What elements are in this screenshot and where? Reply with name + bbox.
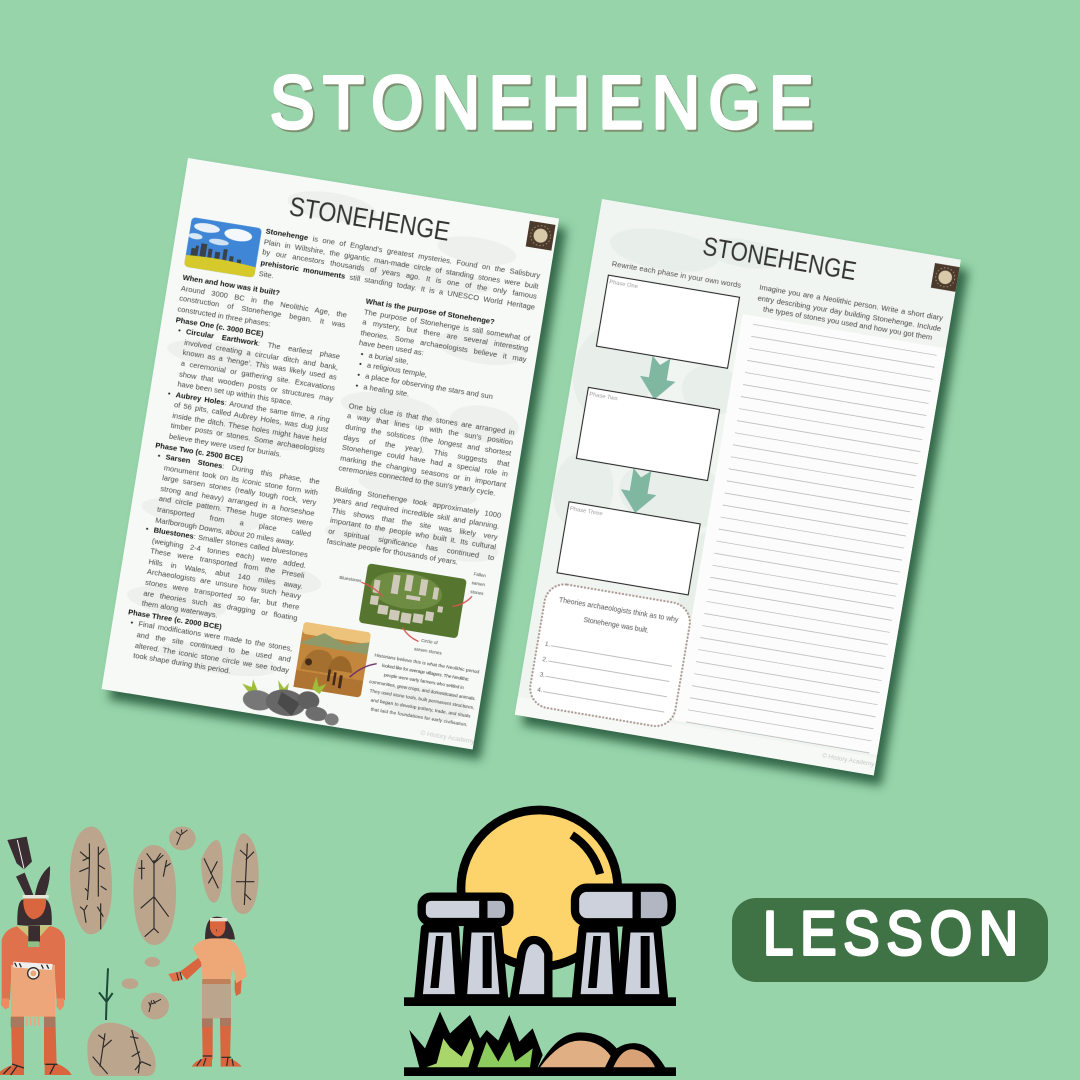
text: when and how was it built: Final modifications were made to the stones, <box>138 620 293 653</box>
panel: activity worksheet <box>515 199 961 775</box>
text: what is the purpose of stonehenge: a place for observing the stars and sun <box>365 371 494 401</box>
text: diary instruction <box>757 283 944 342</box>
text: what is the purpose of stonehenge: fascinate people for thousands of years. <box>326 537 459 567</box>
image caption <box>364 652 481 728</box>
text: when and how was it built: These were transported from the Preseli <box>150 546 305 580</box>
panel: theories dotted box <box>527 581 693 729</box>
text: what is the purpose of stonehenge: What is the purpose of Stonehenge? <box>365 297 495 326</box>
text: introduction: prehistoric monuments still standing today. It is a UNESCO World Heritage <box>260 258 536 312</box>
text: when and how was it built: Circular Earthwork: The earliest phase <box>185 327 341 361</box>
text: when and how was it built: Marlborough Downs, about 20 miles away. <box>155 515 296 547</box>
illustration: slim rock <box>201 840 223 903</box>
text: introduction: Stonehenge is one of England's greatest mysteries. Found on the Salisbury <box>265 227 541 280</box>
icon part: left lintel <box>422 897 509 922</box>
text: when and how was it built: believe they were used for burials. <box>168 432 282 459</box>
panel: theories dotted box: 3. <box>539 671 546 679</box>
illustration: rock with carvings, centre <box>133 845 176 945</box>
sheet heading: STONEHENGE <box>287 191 452 247</box>
text: when and how was it built: construction of Stonehenge began. It was <box>179 294 346 330</box>
icon part: lower ground line <box>404 1067 676 1076</box>
text: diary instruction: Imagine you are a Neolithic person. Write a short diary <box>759 283 944 322</box>
icon part: pillars <box>418 928 664 998</box>
panel: theories dotted box: Theories archaeologists think as to why <box>558 597 679 624</box>
watermark: © History Academy <box>822 753 876 768</box>
text: when and how was it built: Archaeologists are unsure how such heavy <box>146 567 302 601</box>
text: diary instruction: the types of stones you used and how you got them <box>762 305 933 342</box>
text: what is the purpose of stonehenge: or spiritual significance has continued to <box>328 526 495 562</box>
text: when and how was it built: Bluestones: Smaller stones called bluestones <box>153 526 308 560</box>
text: introduction: by our ancestors thousands of years ago. It is one of the only famous <box>262 248 537 301</box>
text: when and how was it built: show that wooden posts or structures may <box>179 369 334 403</box>
illustration: green plant <box>99 968 113 1020</box>
text: diary instruction: entry describing your day building Stonehenge. Include <box>757 293 942 333</box>
panel: theories dotted box: Stonehenge was built. <box>583 617 649 635</box>
sheet heading: STONEHENGE <box>701 231 858 286</box>
badge: lesson <box>732 898 1048 982</box>
text: when and how was it built: inside the ditch. These holes might have held <box>172 411 327 445</box>
text: when and how was it built: transported from a place called <box>156 505 312 539</box>
text: when and how was it built: Aubrey Holes: Around the same time, a ring <box>175 390 331 424</box>
illustration: small rock top <box>169 826 196 850</box>
text: when and how was it built: stones were transported so far, but there <box>145 578 300 612</box>
text: introduction: Site. <box>258 268 274 280</box>
illustration: smaller figure <box>168 917 247 1067</box>
box: phase one: Phase One <box>609 279 638 290</box>
text: when and how was it built: Around 3000 BC in the Neolithic Age, the <box>180 284 348 319</box>
image caption: and began to develop pottery, trade, and rituals <box>370 697 472 719</box>
photo: aerial view of stone circle <box>359 563 467 639</box>
panel: theories dotted box: 1. <box>544 641 551 649</box>
text: when and how was it built: them along waterways. <box>141 599 218 620</box>
image caption: communities, grew crops, and domesticated animals. <box>369 679 476 701</box>
arrow: phase one to phase two <box>637 354 679 403</box>
text: when and how was it built: have been set up within this space. <box>177 379 294 407</box>
text: when and how was it built: strong and heavy) arranged in a horseshoe <box>160 484 315 518</box>
box: phase three: Phase Three <box>569 506 603 517</box>
icon part: right lintel <box>575 888 672 922</box>
text: when and how was it built: of 56 pits, called Aubrey Holes, was dug just <box>173 400 329 434</box>
text: what is the purpose of stonehenge: a mystery, but there are several interesting <box>362 317 529 353</box>
text: when and how was it built: are theories such as dragging or floating <box>143 588 298 622</box>
illustration: rock with carvings, large left <box>70 827 112 934</box>
box: phase three <box>557 502 700 595</box>
photo: stonehenge under blue sky <box>184 217 262 278</box>
text: when and how was it built: altered. The iconic stone circle we see today <box>134 640 290 674</box>
text: what is the purpose of stonehenge: marking the changing seasons or in important <box>340 453 507 489</box>
arrow: phase two to phase three <box>617 467 660 516</box>
illustration: tall rock right <box>231 833 259 914</box>
text: what is the purpose of stonehenge: Building Stonehenge took approximately 1000 <box>335 484 502 520</box>
text: what is the purpose of stonehenge: have been used as: <box>358 338 424 358</box>
text: when and how was it built: timber posts or stones. Some archaeologists <box>170 421 325 455</box>
text: when and how was it built: and circle pattern. These huge stones were <box>158 494 314 528</box>
image caption: people were early farmers who settled in <box>384 672 465 690</box>
image labels: sarsen <box>471 580 486 587</box>
panel: information worksheet <box>102 158 559 749</box>
icon part: sun <box>461 810 618 967</box>
icon: history academy logo <box>526 221 556 251</box>
icon part: grass <box>409 1012 543 1070</box>
text: when and how was it built: Sarsen Stones: During this phase, the <box>165 452 320 486</box>
image labels: stones <box>470 589 485 596</box>
illustration: standing chief figure <box>0 837 72 1075</box>
instruction: rewrite each phase: Rewrite each phase in your own words <box>611 259 742 290</box>
text: what is the purpose of stonehenge: a religious temple, <box>366 361 428 380</box>
text: when and how was it built: known as a ‘henge’. This was likely used as <box>182 348 337 382</box>
text: what is the purpose of stonehenge: One big clue is that the stones are arranged in <box>348 401 515 437</box>
image caption: looked like for average villagers. The Neolithic <box>382 663 470 682</box>
diary writing lines <box>686 324 937 753</box>
icon part: mounds <box>537 1032 667 1070</box>
panel: theories dotted box: 4. <box>537 687 543 694</box>
text: introduction: Plain in Wiltshire, the gigantic man-made circle of standing stones were built <box>263 237 539 291</box>
text: what is the purpose of stonehenge: a way that lines up with the sun's position <box>346 411 514 447</box>
text: when and how was it built: monument took on its iconic stone form with <box>163 463 319 497</box>
box: phase two <box>576 387 720 481</box>
text: what is the purpose of stonehenge: theories. Some archaeologists believe it may <box>360 328 527 364</box>
text: what is the purpose of stonehenge: years and required incredible skill and planning. <box>333 495 500 531</box>
illustration: rocks and grass <box>238 665 345 726</box>
illustration group: figures and rock art <box>0 826 259 1076</box>
text: what is the purpose of stonehenge: The purpose of Stonehenge is still somewhat of <box>363 307 531 343</box>
box: phase two: Phase Two <box>589 392 618 402</box>
text: when and how was it built: (weighing 2-4 tonnes each) were added. <box>151 536 307 570</box>
text: when and how was it built: constructed in three phases: <box>177 304 271 328</box>
text: what is the purpose of stonehenge: Stonehenge could have had a special role in <box>341 443 509 479</box>
icon part: pillar slits <box>430 936 650 988</box>
text: introduction <box>258 227 541 312</box>
image caption: that laid the foundations for early civilisation. <box>370 707 468 727</box>
image labels: Circle of <box>421 638 439 646</box>
text: when and how was it built <box>128 273 348 676</box>
text: what is the purpose of stonehenge: This shows that the site was likely very <box>331 505 498 541</box>
box: phase one <box>596 275 740 368</box>
badge: lesson: LESSON <box>763 899 1018 968</box>
watermark: © History Academy <box>420 729 476 746</box>
panel: theories dotted box: 2. <box>542 656 548 664</box>
text: when and how was it built: and the site continued to be used and <box>136 630 291 664</box>
illustration: pebbles and small rock <box>122 957 169 1019</box>
text: when and how was it built: When and how was it built? <box>182 273 280 298</box>
text: when and how was it built: Phase One (c. 3000 BCE) <box>175 315 264 338</box>
text: what is the purpose of stonehenge: important to the people who built it. Its cultural <box>329 516 497 552</box>
image labels: Fallen <box>473 571 487 578</box>
text: when and how was it built: Phase Three (c. 2000 BCE) <box>128 607 222 631</box>
text: what is the purpose of stonehenge: ceremonies connected to the sun's yearly cycle. <box>338 464 496 498</box>
text: when and how was it built: took shape during this period. <box>133 651 231 676</box>
image labels <box>330 550 487 661</box>
image caption: Historians believe this is what the Neolithic period <box>374 652 480 675</box>
text: what is the purpose of stonehenge: days of the year). This suggests that <box>343 432 510 468</box>
arrows: image annotation pointers <box>347 579 472 694</box>
text: what is the purpose of stonehenge: a healing site. <box>363 382 410 398</box>
image caption: They used stone tools, built permanent structures, <box>369 688 475 710</box>
image labels: sarsen stones <box>414 646 443 656</box>
text: when and how was it built: large sarsen stones (really tough rock, very <box>162 473 317 507</box>
icon part: upper ground line <box>404 997 676 1006</box>
text: when and how was it built: involved creating a circular ditch and bank, <box>184 338 339 372</box>
text: when and how was it built: Hills in Wales, abut 140 miles away. <box>148 557 303 591</box>
icon: history academy logo <box>931 263 960 292</box>
illustration: large rock bottom <box>87 1023 156 1076</box>
text: what is the purpose of stonehenge <box>326 297 531 567</box>
image labels: Bluestones <box>339 575 363 583</box>
text: what is the purpose of stonehenge: a burial site, <box>368 351 409 366</box>
text: when and how was it built: Phase Two (c. 2500 BCE) <box>155 440 244 463</box>
text: when and how was it built: a ceremonial or gathering site. Excavations <box>180 359 336 392</box>
icon: stonehenge with sun and grass <box>404 806 676 1076</box>
text: what is the purpose of stonehenge: during the solstices (the longest and shortest <box>345 422 512 458</box>
photo: neolithic village illustration <box>293 622 371 698</box>
